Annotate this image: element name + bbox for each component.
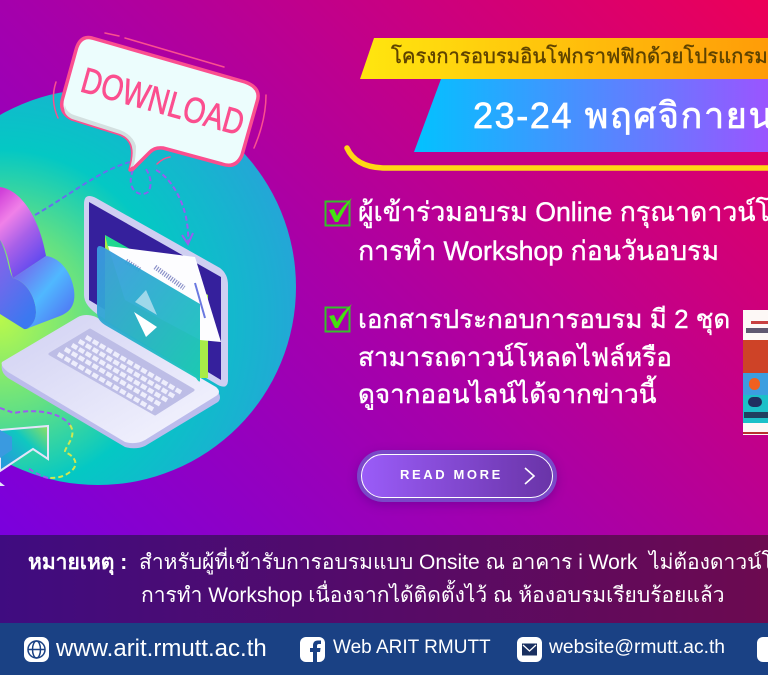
arrow head on connector: [182, 233, 193, 244]
share arrow: [0, 426, 48, 486]
thumbnail footer: [743, 432, 768, 434]
thumbnail blue block: [743, 373, 768, 395]
laptop: [2, 196, 228, 448]
icon: checkbox 1: [324, 198, 352, 226]
teal circle: [0, 89, 296, 485]
button: read more: [357, 450, 557, 502]
dashed connectors: [0, 162, 188, 478]
button: read more: READ MORE: [400, 467, 503, 482]
banner: yellow course title: [360, 38, 768, 79]
triangle up: [135, 290, 157, 315]
thumbnail teal block: [743, 395, 768, 423]
paper sheet: [108, 246, 221, 342]
bullet text 2: [358, 304, 730, 410]
footer bar: [0, 623, 768, 675]
banner: blue date: 23-24 พฤศจิกายน: [473, 95, 768, 136]
banner: yellow course title: โครงการอบรมอินโฟกราฟฟิกด้วยโปรแกรม: [391, 46, 768, 68]
bullet text 2: เอกสารประกอบการอบรม มี 2 ชุด: [358, 304, 730, 334]
facebook page: Web ARIT RMUTT: [333, 637, 491, 658]
bullet text 1: [358, 196, 768, 266]
bullet text 2: สามารถดาวน์โหลดไฟล์หรือ: [358, 342, 672, 372]
folder: [97, 246, 200, 382]
cloud: [0, 187, 74, 329]
icon: partly visible: [757, 637, 768, 662]
laptop screen: [84, 196, 228, 387]
green file: [105, 235, 208, 378]
download label: DOWNLOAD: [77, 59, 249, 143]
bullet text 2: ดูจากออนไลน์ได้จากข่าวนี้: [358, 379, 657, 409]
email: website@rmutt.ac.th: [549, 637, 725, 658]
bullet text 1: การทำ Workshop ก่อนวันอบรม: [358, 236, 719, 266]
yellow underline swoosh: [344, 145, 768, 171]
banner: blue date: [414, 79, 768, 152]
keyboard: [50, 330, 193, 414]
icon: checkbox 2: [324, 304, 352, 332]
thumbnail title: [751, 321, 768, 324]
thumbnail red block: [743, 340, 768, 373]
website: www.arit.rmutt.ac.th: [56, 635, 267, 662]
laptop base: [2, 318, 220, 448]
document thumbnail: [743, 310, 768, 435]
icon: globe: [24, 637, 49, 662]
note line 2: การทำ Workshop เนื่องจากได้ติดตั้งไว้ ณ ห้องอบรมเรียบร้อยแล้ว: [141, 584, 725, 607]
illustration: laptop, cloud and download bubble: [0, 32, 296, 486]
note label: หมายเหตุ :: [28, 551, 127, 574]
speech bubble: download: [53, 33, 266, 170]
triangle down: [134, 312, 157, 337]
icon: facebook: [300, 637, 325, 662]
icon: mail: [517, 637, 542, 662]
note band: [0, 535, 768, 623]
